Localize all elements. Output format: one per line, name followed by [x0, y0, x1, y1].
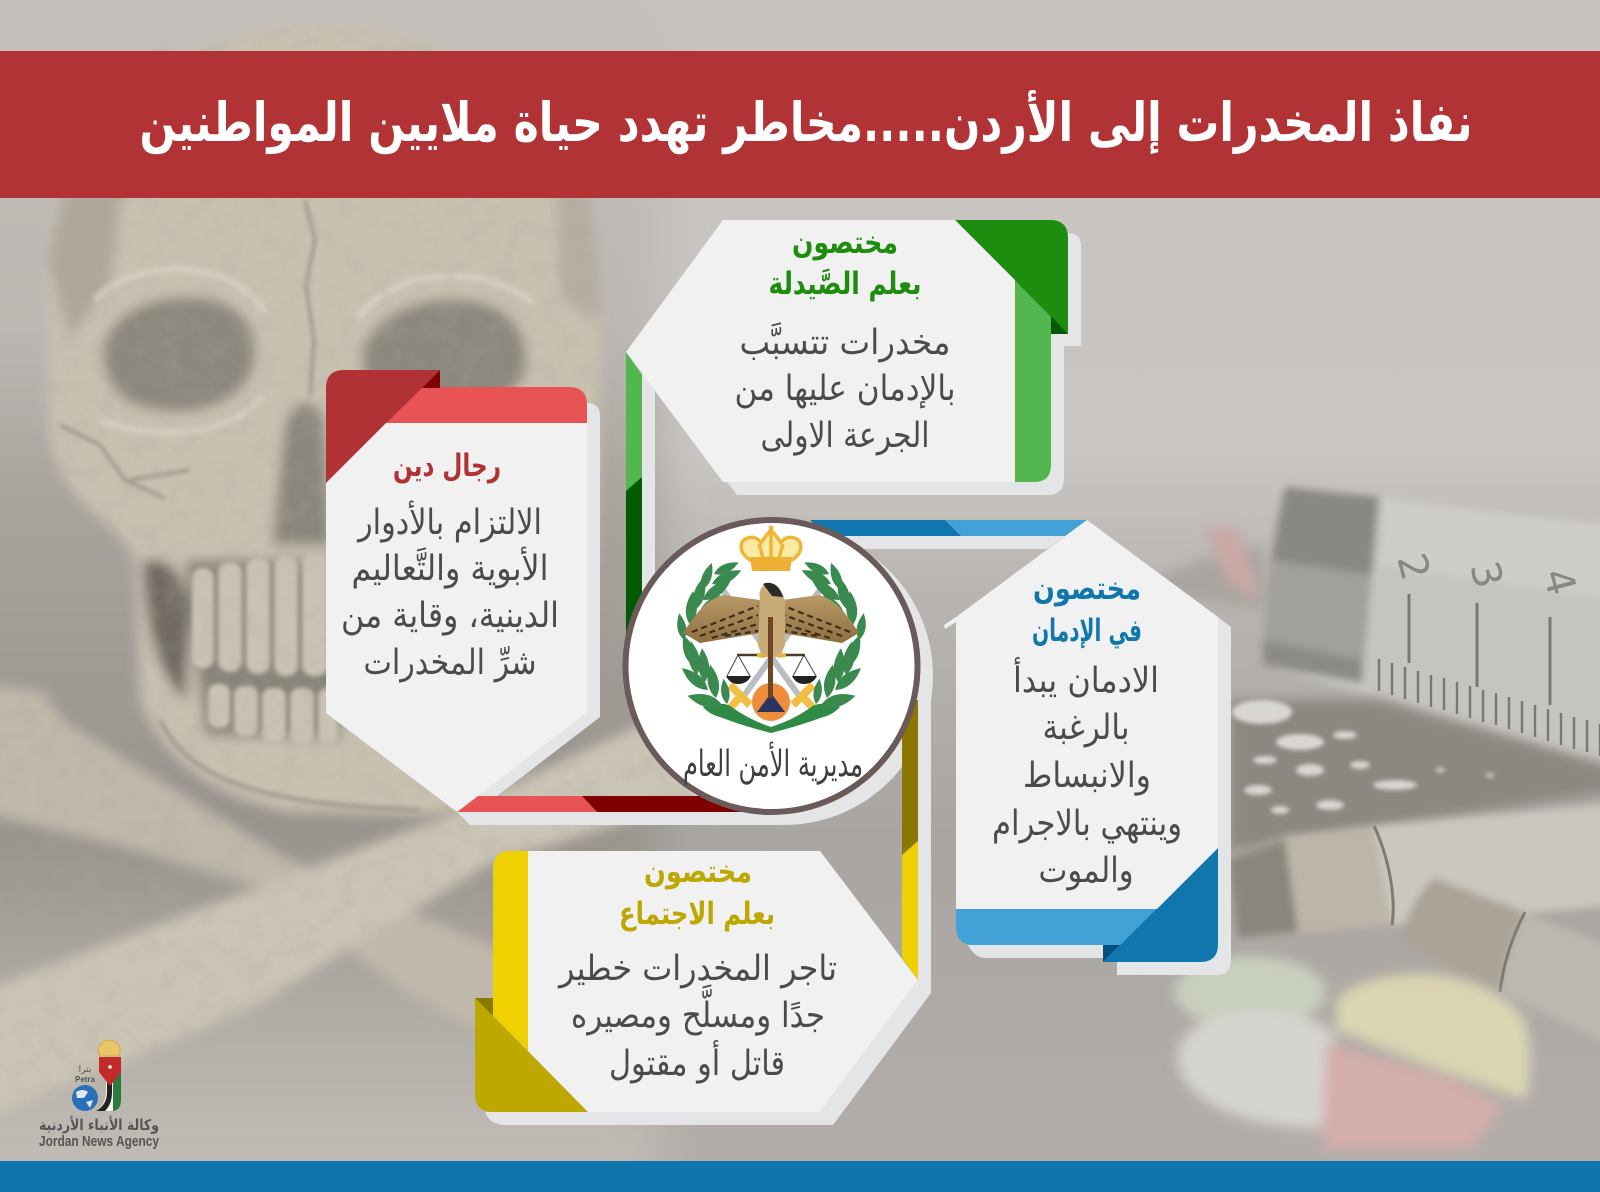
heading: بعلم الاجتماع	[619, 896, 775, 932]
icon: scales	[726, 655, 817, 684]
body text	[992, 657, 1182, 891]
logo: Petra Jordan News Agency: Jordan News Agency	[39, 1133, 160, 1150]
panel: addiction specialists (blue)	[810, 520, 1231, 975]
heading	[619, 854, 775, 932]
syringe: 4	[1533, 564, 1584, 600]
body text: والموت	[1038, 851, 1134, 891]
icon: flag	[96, 1057, 121, 1111]
body text: مخدرات تتسبَّب	[740, 321, 950, 363]
body text: قاتل أو مقتول	[609, 1040, 785, 1084]
footer bar	[0, 1161, 1600, 1192]
body text: بالرغبة	[1042, 708, 1130, 748]
panel: pharmacology specialists (green)	[626, 220, 1081, 640]
icon: falcon	[683, 583, 859, 698]
syringe	[1130, 487, 1600, 770]
heading	[1032, 571, 1142, 649]
logo: Petra Jordan News Agency: بترا	[79, 1065, 91, 1075]
bones	[0, 685, 730, 1120]
emblem calligraphy: مديرية الأمن العام	[683, 741, 863, 785]
icon: orange disc with triangle	[752, 683, 790, 721]
body text: بالإدمان عليها من	[734, 369, 956, 409]
icon: swords	[718, 583, 825, 717]
skull cracks and ridges	[60, 200, 532, 810]
body text: الأبوية والتَّعاليم	[352, 546, 548, 589]
icon: globe	[72, 1085, 98, 1111]
panel: clerics (red)	[326, 370, 780, 825]
heading: في الإدمان	[1032, 613, 1142, 649]
logo: Petra Jordan News Agency: وكالة الأنباء الأردنية	[39, 1116, 159, 1134]
icon: crown	[741, 526, 801, 571]
heading: مختصون	[1033, 571, 1141, 607]
body text: الادمان يبدأ	[1013, 657, 1159, 701]
body text: الجرعة الاولى	[760, 416, 930, 456]
title bar	[0, 51, 1600, 198]
central emblem: Public Security Directorate	[626, 520, 918, 812]
syringe: 3	[1460, 557, 1511, 593]
heading: مختصون	[644, 854, 752, 890]
body text: شرِّ المخدرات	[364, 643, 536, 683]
body text: تاجر المخدرات خطير	[557, 949, 837, 989]
body text	[734, 321, 956, 456]
cigarettes	[1229, 803, 1600, 1050]
logo: Petra Jordan News Agency: Petra	[75, 1075, 96, 1084]
logo: Petra Jordan News Agency	[39, 1040, 160, 1150]
body text: وينتهي بالاجرام	[992, 804, 1182, 844]
body text: الدينية، وقاية من	[341, 596, 559, 636]
body text	[557, 949, 837, 1084]
skull teeth	[192, 554, 338, 744]
icon: crown	[98, 1040, 120, 1056]
photo texture	[166, 274, 451, 604]
body text: جدًا ومسلَّح ومصيره	[571, 983, 825, 1036]
body text: الالتزام بالأدوار	[356, 500, 542, 543]
skull	[47, 25, 600, 815]
body text	[341, 500, 559, 683]
heading	[768, 225, 922, 302]
powder on dark table	[1230, 700, 1600, 850]
heading: مختصون	[792, 225, 898, 261]
circle shadow	[635, 527, 933, 825]
panel: sociology specialists (yellow)	[475, 690, 931, 1125]
heading: رجال دين	[393, 448, 501, 484]
icon: wreath	[675, 559, 868, 733]
body text: والانبساط	[1023, 756, 1151, 796]
heading: بعلم الصَّيدلة	[768, 266, 922, 302]
pills	[1174, 956, 1530, 1150]
syringe: 2	[1387, 549, 1438, 585]
